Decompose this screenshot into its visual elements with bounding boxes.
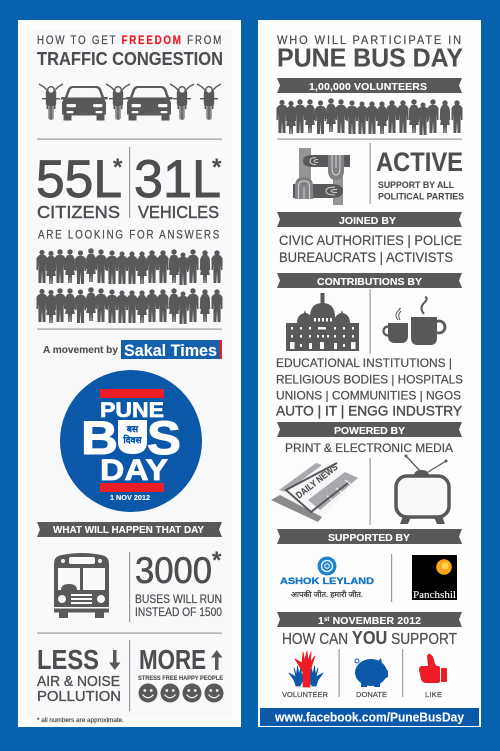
text: a movement by: A movement by: [43, 344, 118, 356]
block: less pollution: AIR & NOISE: [37, 674, 120, 690]
block: active support: [376, 147, 464, 202]
block: less pollution: LESS: [37, 644, 99, 675]
icon: piggy bank: [355, 658, 388, 687]
block: more happy people: STRESS FREE HAPPY PEOPLE: [138, 675, 223, 682]
icon: bus: [54, 553, 109, 618]
heading: how to get freedom: TRAFFIC CONGESTION: [37, 48, 223, 69]
ribbon: 1st November 2012: 1: [318, 615, 324, 627]
block: more happy people: [138, 644, 224, 702]
label: donate: DONATE: [356, 690, 387, 699]
logo: Ashok Leyland: आपकी जीत. हमारी जीत.: [291, 590, 363, 599]
stat: 3000 buses: INSTEAD OF 1500: [135, 605, 222, 619]
ribbon: supported by: SUPPORTED BY: [328, 532, 410, 544]
icon: coffee cups: [384, 297, 445, 345]
text: joined by list: [279, 232, 462, 265]
ribbon: volunteers: [277, 78, 462, 93]
stat: 3000 buses: *: [212, 547, 222, 574]
ribbon: 1st November 2012: st: [324, 617, 329, 623]
ribbon: contributions by: CONTRIBUTIONS BY: [317, 276, 422, 288]
heading: how can you support: HOW CAN YOU SUPPORT: [282, 627, 457, 648]
ribbon: volunteers: 1,00,000 VOLUNTEERS: [309, 81, 427, 93]
logo: Pune Bus Day badge: [60, 370, 202, 512]
text: are looking for answers: ARE LOOKING FOR ANSWERS: [38, 230, 221, 242]
ribbon: powered by: POWERED BY: [334, 425, 405, 437]
crowd row 2: [36, 287, 222, 324]
icon: newspaper: [271, 462, 358, 522]
text: contributions list: [276, 356, 463, 418]
ribbon: contributions by: [277, 273, 462, 288]
ribbon: what will happen that day: [37, 522, 222, 537]
bar: facebook link: www.facebook.com/PuneBusDay: [274, 710, 464, 724]
text: joined by list: BUREAUCRATS | ACTIVISTS: [279, 249, 453, 265]
block: less pollution: [37, 644, 121, 705]
logo: Pune Bus Day badge: बस: [126, 424, 139, 434]
icon: television: [396, 454, 449, 524]
label: volunteer: VOLUNTEER: [282, 690, 329, 699]
ribbon: 1st November 2012: NOVEMBER 2012: [330, 615, 421, 627]
stat: 55L citizens: 55L: [36, 150, 122, 209]
panel: right column: [258, 20, 481, 727]
stat: 3000 buses: 3000: [135, 550, 212, 591]
icon: volunteer hands: [289, 651, 323, 687]
panel: left column: [18, 20, 241, 727]
heading: who will participate: PUNE BUS DAY: [277, 42, 463, 72]
stat: 3000 buses: [135, 547, 222, 619]
logo: Sakal Times: Sakal Times: [124, 341, 217, 360]
block: active support: POLITICAL PARTIES: [378, 192, 464, 202]
logo: Pune Bus Day badge: S: [147, 411, 181, 464]
block: more happy people: MORE: [139, 644, 206, 675]
icon: joined hands: [293, 148, 350, 205]
heading: how to get freedom: [37, 35, 223, 69]
block: less pollution: POLLUTION: [37, 689, 121, 705]
text: contributions list: RELIGIOUS BODIES | HOSPITALS: [276, 372, 463, 386]
ribbon: supported by: [277, 529, 462, 544]
icon row: motorbikes and cars: [39, 84, 221, 120]
logo: Pune Bus Day badge: दिवस: [122, 434, 143, 445]
heading: who will participate: WHO WILL PARTICIPATE IN: [277, 35, 463, 47]
icon: building: [286, 293, 359, 351]
logo: Panchshil: [412, 555, 457, 601]
text: contributions list: EDUCATIONAL INSTITUTIONS |: [276, 356, 452, 370]
stat: 31L vehicles: VEHICLES: [138, 202, 219, 222]
ribbon: powered by: [277, 422, 462, 437]
stat: 55L citizens: CITIZENS: [37, 202, 120, 222]
bar: facebook link: [260, 708, 479, 726]
logo: Pune Bus Day badge: PUNE: [100, 399, 164, 422]
icon: thumbs up: [419, 654, 447, 683]
logo: Ashok Leyland: [280, 556, 375, 599]
ribbon: what will happen that day: WHAT WILL HAPPEN THAT DAY: [53, 524, 204, 536]
ribbon: 1st November 2012: [277, 612, 462, 627]
logo: Pune Bus Day badge: DAY: [100, 454, 168, 487]
crowd: volunteers: [276, 98, 462, 135]
stat: 55L citizens: *: [113, 154, 123, 181]
label: like: LIKE: [425, 690, 442, 699]
ribbon: joined by: [277, 212, 462, 227]
block: active support: SUPPORT BY ALL: [378, 180, 454, 190]
logo: Pune Bus Day badge: B: [81, 411, 118, 464]
text: contributions list: UNIONS | COMMUNITIES | NGOS: [276, 388, 461, 402]
text: contributions list: AUTO | IT | ENGG INDUSTRY: [276, 404, 462, 418]
stat: 3000 buses: BUSES WILL RUN: [135, 592, 222, 606]
ribbon: joined by: JOINED BY: [339, 215, 396, 227]
logo: Ashok Leyland: ASHOK LEYLAND: [280, 576, 375, 586]
heading: how to get freedom: HOW TO GET FREEDOM FROM: [37, 35, 223, 47]
stat: 31L vehicles: 31L: [134, 150, 221, 209]
block: active support: ACTIVE: [376, 147, 463, 177]
footnote: * all numbers are approximate.: [37, 718, 124, 724]
text: joined by list: CIVIC AUTHORITIES | POLICE: [279, 232, 462, 248]
icon: newspaper: DAILY NEWS: [294, 462, 340, 501]
stat: 31L vehicles: *: [212, 154, 222, 181]
text: print and electronic media: PRINT & ELECTRONIC MEDIA: [285, 441, 453, 455]
crowd row 1: [36, 248, 222, 285]
logo: Panchshil: Panchshil: [413, 590, 456, 601]
logo: Pune Bus Day badge: 1 NOV 2012: [110, 495, 150, 502]
